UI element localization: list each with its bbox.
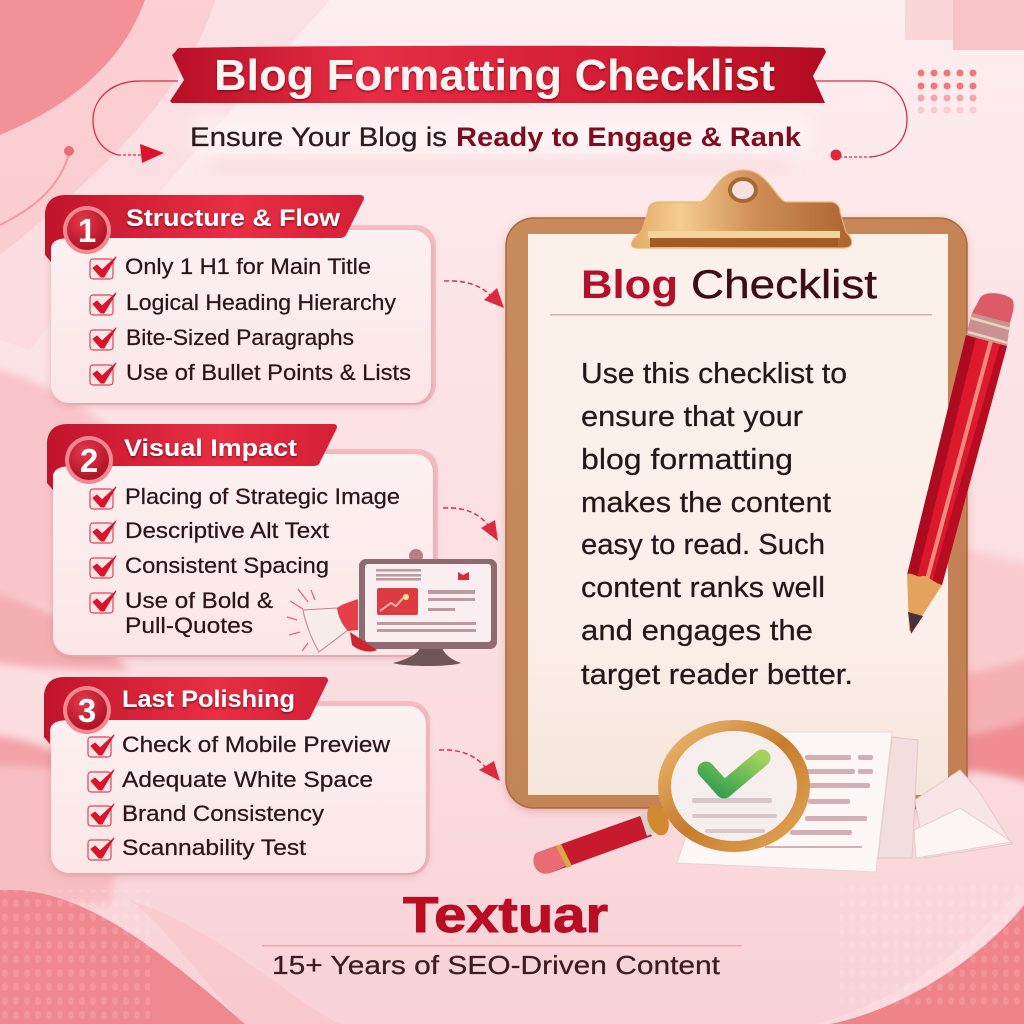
connector: left curve to subtitle	[64, 81, 178, 163]
clipboard: Checklist	[691, 263, 877, 307]
clipboard	[506, 170, 967, 808]
checklist 3	[88, 732, 391, 860]
board	[506, 218, 967, 808]
checklist 3: Check of Mobile Preview	[122, 732, 391, 757]
checklist 2: Placing of Strategic Image	[125, 484, 400, 509]
checklist 2: Pull-Quotes	[125, 613, 253, 638]
ribbon title 3: Last Polishing	[122, 686, 295, 713]
icon: paper stack	[677, 732, 1012, 872]
checklist 3: Brand Consistency	[122, 801, 325, 826]
panel 3: Last Polishing	[44, 677, 430, 875]
handle	[534, 816, 652, 874]
green check	[706, 758, 762, 790]
heading rule	[550, 314, 932, 316]
checklist 1: Bite-Sized Paragraphs	[126, 325, 354, 350]
icon: monitor with megaphone	[287, 549, 497, 666]
checklist 2	[90, 484, 400, 638]
badge 2	[65, 436, 113, 484]
subtitle: Ready to Engage & Rank	[456, 122, 802, 152]
panel 2: Visual Impact	[47, 424, 438, 657]
clipboard clip	[632, 170, 852, 248]
clipboard body text: ensure that your	[581, 401, 803, 433]
megaphone	[350, 632, 377, 652]
footer brand: Textuar	[403, 887, 608, 943]
clipboard body text: blog formatting	[581, 444, 793, 476]
clipboard body text	[581, 358, 853, 691]
checklist 1: Logical Heading Hierarchy	[126, 290, 397, 315]
subtitle: Ensure Your Blog is	[190, 122, 447, 152]
badge 1	[63, 206, 111, 254]
clipboard body text: Use this checklist to	[581, 358, 847, 390]
paper	[528, 234, 948, 795]
ribbon title 2: Visual Impact	[124, 435, 297, 462]
decorative dot grid	[918, 70, 976, 114]
clipboard body text: and engages the	[581, 615, 813, 647]
checklist 1: Only 1 H1 for Main Title	[125, 254, 371, 279]
title text: Blog Formatting Checklist	[214, 51, 775, 100]
clipboard body text: content ranks well	[581, 572, 825, 604]
badge 3: 3	[78, 692, 96, 729]
lens	[658, 720, 810, 852]
footer tagline: 15+ Years of SEO-Driven Content	[272, 950, 721, 980]
clipboard heading: Blog	[581, 263, 678, 307]
checklist 3: Scannability Test	[122, 835, 307, 860]
clipboard body text: target reader better.	[581, 659, 853, 691]
checklist 2: Descriptive Alt Text	[125, 518, 330, 543]
checklist 1: Use of Bullet Points & Lists	[126, 360, 411, 385]
badge 1: 1	[78, 212, 96, 249]
clipboard body text: makes the content	[581, 487, 831, 519]
checklist 3: Adequate White Space	[122, 767, 373, 792]
connector: right curve to subtitle	[815, 81, 907, 160]
badge 2: 2	[80, 442, 98, 479]
ribbon 1	[45, 195, 364, 262]
ribbon 2	[47, 424, 337, 490]
title banner	[170, 46, 826, 103]
panel 1: Structure & Flow	[45, 195, 436, 405]
arrow: panel 1 to clipboard	[444, 281, 504, 308]
arrow: panel 3 to clipboard	[439, 750, 500, 781]
ribbon 3	[44, 677, 328, 744]
icon: magnifying glass with green check	[534, 720, 810, 874]
clipboard body text: easy to read. Such	[581, 529, 825, 561]
checklist 1	[90, 254, 411, 385]
ribbon title 1: Structure & Flow	[126, 205, 340, 232]
monitor stand	[393, 648, 461, 666]
icon: red pencil	[907, 293, 1014, 634]
checklist 2: Consistent Spacing	[125, 553, 329, 578]
arrow: panel 2 to clipboard	[443, 508, 498, 541]
badge 3	[63, 686, 111, 734]
footer rule	[262, 945, 742, 946]
checklist 2: Use of Bold &	[125, 588, 273, 613]
